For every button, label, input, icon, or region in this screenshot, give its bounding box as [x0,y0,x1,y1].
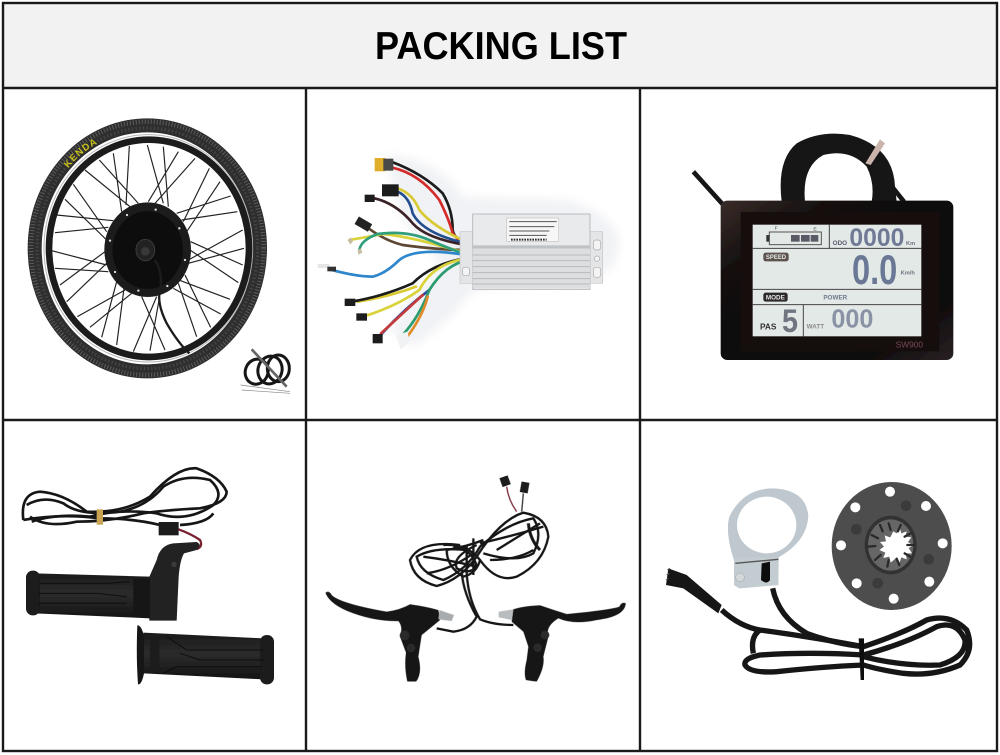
rim [44,135,253,362]
battery icon: E [813,226,817,232]
display body [721,201,953,360]
assist level: PAS [760,322,777,332]
connector [159,522,201,549]
grip 2 [137,625,274,684]
controller housing [460,214,603,289]
panel: throttle grips [23,468,274,684]
mode label [763,293,788,302]
odometer: ODO [833,240,847,247]
LCD screen: 0000 [849,225,904,252]
motor cable [155,260,189,353]
model label: SW900 [896,339,923,349]
panel: controller [318,155,619,350]
LCD screen: Km/h [901,271,915,277]
LCD screen: 5 [782,303,798,339]
cable bundle [410,513,548,632]
right lever [499,603,626,682]
soft shadow [386,155,619,347]
spokes [52,145,244,352]
connector plug [666,568,722,613]
panel: brake levers [325,475,626,682]
LCD screen: MODE [766,294,785,301]
LCD screen: 000 [831,304,873,334]
grip 1 [26,571,150,618]
title: PACKING LIST [375,25,627,68]
cable coil [693,134,904,205]
panel: LCD display [693,134,953,360]
wires [329,162,469,338]
LCD screen: SPEED [766,255,787,261]
power label: POWER [823,295,848,302]
coiled cable [23,468,227,525]
speed label [763,253,789,261]
wattage: WATT [807,324,824,331]
panel: hub motor wheel [28,118,291,394]
connectors [318,158,409,350]
battery icon: F [775,226,778,232]
LCD screen: Km [906,241,915,247]
tire brand: KENDA [64,139,98,168]
connector wires [499,475,529,512]
mounting bracket [728,488,808,588]
battery icon [766,226,821,245]
hub motor [104,202,191,297]
panel: pedal assist sensor [666,482,970,680]
zip tie [865,139,885,165]
header band [3,3,997,88]
sensor cable [722,588,970,674]
left lever [325,592,454,682]
cable tie [97,509,103,525]
LCD screen [753,225,921,339]
coiled accessory cable [241,349,290,393]
cable tie [859,638,864,680]
speed readout: 0.0 [852,246,897,293]
throttle housing [149,542,200,621]
sensor disc [832,482,952,610]
tire [31,122,264,375]
